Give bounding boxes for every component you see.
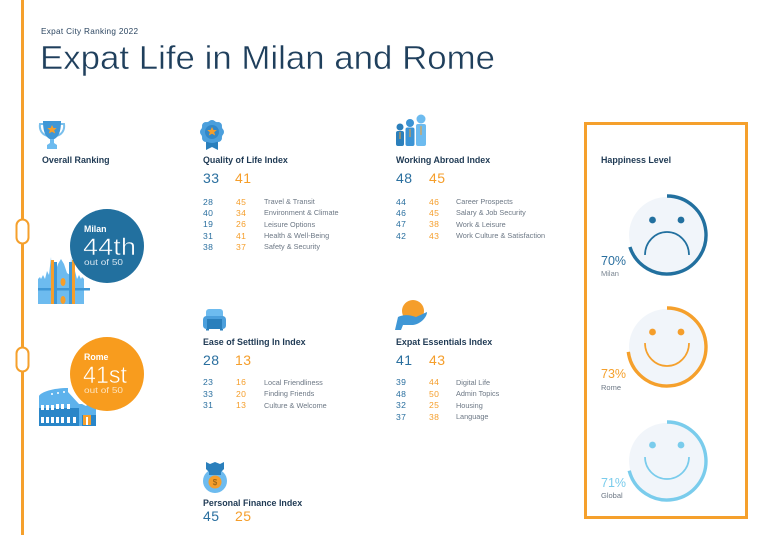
icon: money bag: $ [213,478,218,487]
sub-index table [203,377,327,410]
sub-index table [396,377,500,422]
sub-index table: Safety & Security [264,242,320,251]
overall scores [396,170,446,186]
sub-index table: Career Prospects [456,197,513,206]
label: Rome 73%: Rome [601,383,621,392]
overall scores: 45 [429,170,446,186]
Milan rank badge: 44th [83,234,136,261]
label: Milan 70%: 70% [601,254,626,268]
label: Global 71% [601,476,626,500]
section: Ease of Settling In Index [203,309,327,410]
heading: Personal Finance Index [203,498,302,508]
section: Working Abroad Index [396,114,545,241]
panel: happiness level [586,124,746,518]
sub-index table: Admin Topics [456,389,500,398]
sub-index table: Environment & Climate [264,208,339,217]
overall scores: 43 [429,352,446,368]
sub-index table: 48 [396,389,406,399]
sub-index table [203,197,339,252]
sub-index table: Work & Leisure [456,220,506,229]
sub-index table: Culture & Welcome [264,401,327,410]
overall scores [203,508,252,524]
sub-index table: 38 [429,412,439,422]
overall scores: 33 [203,170,220,186]
overall scores: 28 [203,352,220,368]
icon: three people [396,114,426,146]
section: Personal Finance Index [203,462,302,524]
label: Global 71%: Global [601,491,623,500]
sub-index table: 23 [203,377,213,387]
sub-index table: 16 [236,377,246,387]
title: Expat Life in Milan and Rome [40,39,495,76]
sub-index table: Salary & Job Security [456,208,526,217]
label: Milan 70% [601,254,626,278]
overall scores: 48 [396,170,413,186]
sub-index table: Local Friendliness [264,378,323,387]
subtitle: Expat City Ranking 2022 [41,27,138,36]
sub-index table: 33 [203,389,213,399]
sub-index table: 28 [203,197,213,207]
sub-index table: Language [456,412,488,421]
sub-index table: Leisure Options [264,220,315,229]
sub-index table: 41 [236,231,246,241]
sub-index table: 19 [203,219,213,229]
sub-index table: 37 [396,412,406,422]
sub-index table: 38 [203,242,213,252]
label: Milan 70%: Milan [601,269,619,278]
Milan rank badge: out of 50 [84,258,124,267]
Rome rank badge: 41st [83,362,127,389]
sub-index table: Health & Well-Being [264,231,329,240]
icon: Milan cathedral [38,257,90,304]
Rome rank badge: out of 50 [84,386,124,395]
section: Expat Essentials Index [395,300,500,422]
gauge: Global happy face [629,422,706,500]
overall scores: 41 [235,170,252,186]
overall scores [203,352,252,368]
heading: Working Abroad Index [396,155,490,165]
sub-index table [396,197,545,241]
sub-index table: 26 [236,219,246,229]
gauge: Rome happy face [628,308,706,386]
sub-index table: 38 [429,219,439,229]
overall scores [203,170,252,186]
overall scores [396,352,446,368]
sub-index table: 47 [396,219,406,229]
sub-index table: 25 [429,400,439,410]
icon: trophy [40,121,64,149]
sub-index table: 40 [203,208,213,218]
section: Quality of Life Index [200,120,339,252]
sub-index table: 44 [429,377,439,387]
sub-index table: 43 [429,231,439,241]
sub-index table: 37 [236,242,246,252]
sub-index table: 45 [429,208,439,218]
label: Rome 73% [601,367,626,392]
sub-index table: Housing [456,401,483,410]
label: Rome 73%: 73% [601,367,626,381]
sub-index table: 42 [396,231,406,241]
sub-index table: 46 [429,197,439,207]
section: overall ranking [38,121,144,426]
icon: hand holding coin [395,300,427,330]
sub-index table: 32 [396,400,406,410]
overall scores: 45 [203,508,220,524]
overall scores: 13 [235,352,252,368]
sub-index table: 31 [203,231,213,241]
timeline rail with two nodes [16,0,28,535]
sub-index table: 39 [396,377,406,387]
heading: Overall Ranking [42,155,110,165]
sub-index table: Digital Life [456,378,490,387]
sub-index table: Finding Friends [264,389,315,398]
sub-index table: 31 [203,400,213,410]
heading: Expat Essentials Index [396,337,492,347]
sub-index table: 50 [429,389,439,399]
overall scores: 25 [235,508,252,524]
Milan rank badge [70,209,144,283]
Rome rank badge [70,337,144,411]
heading: Happiness Level [601,155,671,165]
sub-index table: Travel & Transit [264,197,315,206]
label: Global 71%: 71% [601,476,626,490]
sub-index table: 13 [236,400,246,410]
Milan rank badge: Milan [84,224,106,234]
sub-index table: 34 [236,208,246,218]
Rome rank badge: Rome [84,352,109,362]
heading: Quality of Life Index [203,155,288,165]
icon: Colosseum [39,388,96,426]
icon: armchair [203,309,226,330]
sub-index table: 44 [396,197,406,207]
sub-index table: 45 [236,197,246,207]
gauge: Milan sad face [629,196,706,274]
overall scores: 41 [396,352,413,368]
sub-index table: 46 [396,208,406,218]
icon: medal [200,120,224,150]
sub-index table: Work Culture & Satisfaction [456,231,545,240]
sub-index table: 20 [236,389,246,399]
heading: Ease of Settling In Index [203,337,306,347]
